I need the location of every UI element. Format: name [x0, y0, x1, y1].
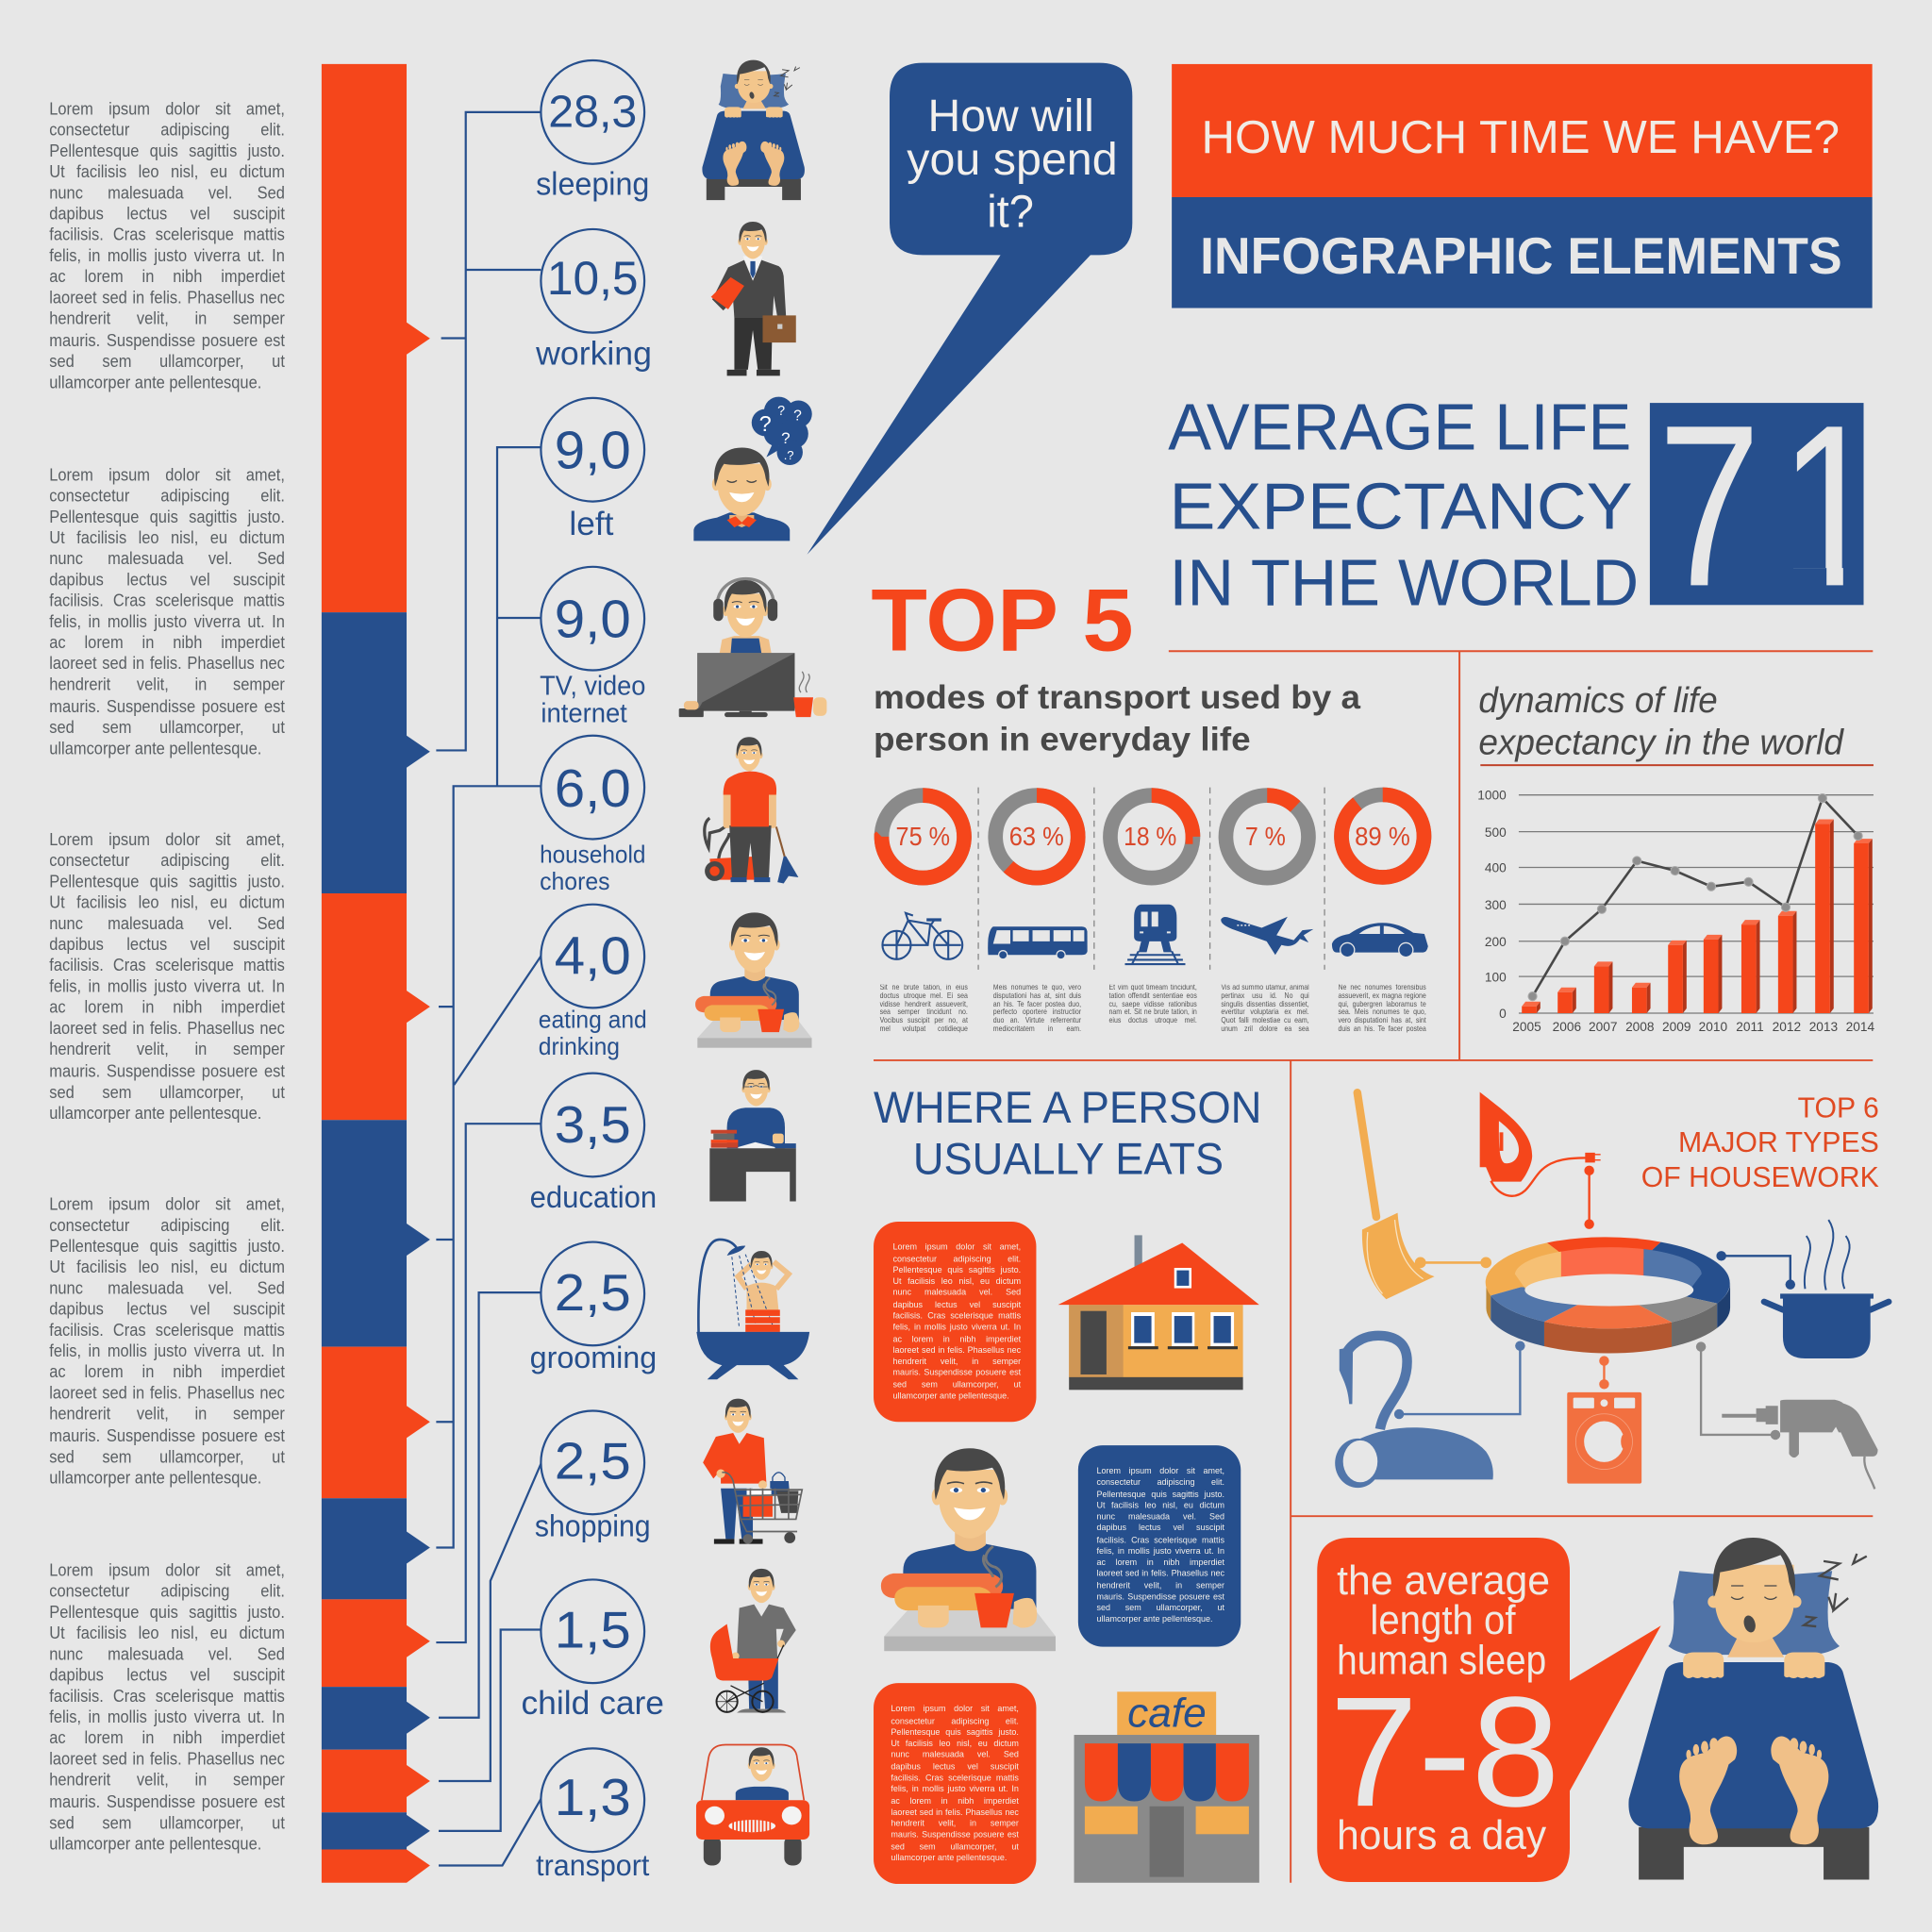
- text block 4: ac lorem in nibh imperdiet: [49, 1362, 285, 1381]
- text block 4: mauris. Suspendisse posuere est: [49, 1425, 285, 1444]
- panel: orange text box 2: Ut facilisis leo nisl, eu dictum: [891, 1740, 1019, 1749]
- panel: orange text box 1: consectetur adipiscing elit.: [893, 1255, 1021, 1264]
- text block 3: consectetur adipiscing elit.: [49, 850, 285, 870]
- panel: orange text box 2: felis, in mollis justo viverra ut. In: [891, 1786, 1019, 1794]
- text block 4: laoreet sed in felis. Phasellus nec: [49, 1383, 285, 1403]
- text blocks: left column: [49, 98, 286, 1857]
- panel: orange text box 2: ac lorem in nibh imperdiet: [891, 1797, 1019, 1806]
- text block 5: laoreet sed in felis. Phasellus nec: [49, 1749, 285, 1769]
- caption 3: [1109, 985, 1198, 1036]
- panel: orange text box 2: [874, 1683, 1036, 1884]
- circle: 6,0 household: chores: [540, 867, 610, 895]
- text block 2: laoreet sed in felis. Phasellus nec: [49, 654, 285, 674]
- text block 5: dapibus lectus vel suscipit: [49, 1665, 285, 1684]
- icon: thinking man with question bubble: [693, 397, 812, 541]
- text block 2: Lorem ipsum dolor sit amet,: [49, 464, 285, 484]
- heading: top 5: modes of transport used by a: [874, 679, 1360, 716]
- circle: 1,5 child care: child care: [521, 1685, 664, 1722]
- text block 4: Ut facilisis leo nisl, eu dictum: [49, 1257, 285, 1276]
- text block 1: consectetur adipiscing elit.: [49, 119, 285, 139]
- circle: 6,0 household: household: [540, 840, 645, 868]
- panel: blue text box: Pellentesque quis sagittis justo.: [1096, 1491, 1224, 1499]
- text block 4: nunc malesuada vel. Sed: [49, 1277, 285, 1297]
- text block 4: hendrerit velit, in semper: [49, 1404, 285, 1424]
- panel: orange text box 2: hendrerit velit, in semper: [891, 1820, 1019, 1828]
- text block 4: ullamcorper ante pellentesque.: [49, 1467, 261, 1487]
- circle: 9,0 TV: TV, video: [540, 672, 645, 702]
- text block 3: laoreet sed in felis. Phasellus nec: [49, 1018, 285, 1038]
- icon: thinking man with question bubble: ?: [781, 429, 791, 447]
- panel: orange text box 1: mauris. Suspendisse posuere est: [893, 1370, 1021, 1378]
- circle: 4,0 eating: [539, 905, 647, 1060]
- caption 2: an his. Te facer postea duo,: [993, 1000, 1081, 1008]
- donut: 89 percent: [1341, 794, 1424, 877]
- caption 1: mel volutpat cotidieque: [879, 1024, 967, 1033]
- heading: top 5: [871, 571, 1360, 758]
- donut: 75 percent: 75 %: [896, 822, 950, 851]
- panel: orange text box 1: nunc malesuada vel. Sed: [893, 1290, 1021, 1298]
- panel: blue text box: laoreet sed in felis. Phasellus nec: [1096, 1571, 1224, 1579]
- text block 2: dapibus lectus vel suscipit: [49, 569, 285, 589]
- donut: 75 percent: [882, 795, 964, 878]
- text block 5: consectetur adipiscing elit.: [49, 1580, 285, 1600]
- activity circles and labels: [521, 60, 664, 1882]
- heading: average life expectancy 71: EXPECTANCY: [1170, 469, 1633, 542]
- circle: 6,0 household: [540, 736, 645, 895]
- icon: power drill with connector: [1696, 1341, 1878, 1489]
- icon: vacuum cleaner with connector: [1335, 1336, 1525, 1488]
- circle: 3,5 education: education: [530, 1179, 657, 1214]
- chart: life expectancy bars and line: 1000: [1477, 789, 1507, 803]
- bars: [1522, 819, 1873, 1013]
- speech bubble: how will you spend it: [808, 63, 1132, 555]
- title banner: HOW MUCH TIME WE HAVE?: [1201, 112, 1840, 163]
- panel: blue text box: ullamcorper ante pellentesque.: [1096, 1616, 1213, 1624]
- caption 4: [1221, 985, 1309, 1036]
- chart: life expectancy bars and line: 2006: [1553, 1020, 1581, 1034]
- heading: top 6 major types of housework: TOP 6: [1798, 1091, 1879, 1124]
- panel: orange text box 2: laoreet sed in felis. Phasellus nec: [891, 1808, 1019, 1817]
- panel: orange text box 1: dapibus lectus vel suscipit: [893, 1301, 1021, 1309]
- chart: life expectancy bars and line: 500: [1485, 825, 1507, 840]
- text block 4: [49, 1193, 286, 1491]
- circle: 2,5 shopping: [535, 1411, 651, 1543]
- donut: 18 percent: 18 %: [1124, 822, 1176, 851]
- text block 3: dapibus lectus vel suscipit: [49, 934, 285, 954]
- icon: person driving car: [696, 1744, 809, 1865]
- heading: top 6 major types of housework: [1641, 1091, 1879, 1193]
- text block 1: Lorem ipsum dolor sit amet,: [49, 98, 285, 118]
- callout: average length of human sleep: the average: [1337, 1558, 1550, 1604]
- icon: person with baby stroller: [710, 1569, 796, 1713]
- heading: top 6 major types of housework: MAJOR TYPES: [1678, 1125, 1879, 1158]
- chart: life expectancy bars and line: 2014: [1846, 1020, 1874, 1034]
- circle: 28,3 sleeping: [536, 60, 649, 202]
- donut: 7 percent: [1225, 795, 1308, 878]
- chart: life expectancy bars and line: 0: [1499, 1007, 1507, 1021]
- text block 5: mauris. Suspendisse posuere est: [49, 1790, 285, 1810]
- icon: person shopping with cart: [703, 1399, 802, 1544]
- icon: person studying at desk: [709, 1070, 796, 1201]
- panel: blue text box: facilisis. Cras scelerisque mattis: [1096, 1536, 1224, 1544]
- panel: blue text box: dapibus lectus vel suscipit: [1096, 1524, 1224, 1533]
- caption 4: evertitur voluptaria ex mel.: [1221, 1008, 1309, 1017]
- text block 2: sed sem ullamcorper, ut: [49, 717, 285, 737]
- text block 5: Pellentesque quis sagittis justo.: [49, 1602, 285, 1621]
- panel: orange text box 1: Lorem ipsum dolor sit amet,: [893, 1243, 1021, 1253]
- text block 1: ac lorem in nibh imperdiet: [49, 266, 285, 286]
- text block 5: Lorem ipsum dolor sit amet,: [49, 1559, 285, 1579]
- text block 1: laoreet sed in felis. Phasellus nec: [49, 288, 285, 308]
- circle: 2,5 grooming: [530, 1242, 657, 1374]
- text block 1: ullamcorper ante pellentesque.: [49, 372, 261, 391]
- caption 5: [1339, 985, 1427, 1036]
- text block 4: facilisis. Cras scelerisque mattis: [49, 1320, 285, 1340]
- speech bubble: how will you spend it: How will: [928, 91, 1094, 142]
- icon: thinking man with question bubble: ?: [777, 404, 785, 419]
- circle: 9,0 left: left: [569, 506, 614, 542]
- text block 1: sed sem ullamcorper, ut: [49, 351, 285, 371]
- text block 3: nunc malesuada vel. Sed: [49, 913, 285, 933]
- panel: orange text box 2: ullamcorper ante pellentesque.: [891, 1855, 1007, 1863]
- circle: 1,3 transport: transport: [536, 1849, 650, 1882]
- circle: 1,3 transport: 1,3: [555, 1768, 631, 1826]
- text block 2: nunc malesuada vel. Sed: [49, 548, 285, 568]
- panel: blue text box: Lorem ipsum dolor sit amet,: [1096, 1468, 1224, 1476]
- circle: 9,0 TV: [540, 567, 645, 728]
- circle: 1,5 child care: 1,5: [555, 1600, 631, 1658]
- donut: 7 percent: 7 %: [1245, 822, 1286, 851]
- circle: 1,5 child care: [521, 1579, 664, 1722]
- text block 2: Ut facilisis leo nisl, eu dictum: [49, 527, 285, 547]
- circle: 2,5 grooming: 2,5: [555, 1263, 631, 1322]
- caption 5: sea. Meis nonumes te quo,: [1339, 1008, 1426, 1017]
- text block 1: felis, in mollis justo viverra ut. In: [49, 245, 285, 265]
- circle: 6,0 household: 6,0: [555, 758, 631, 818]
- caption 5: assueverit, ex magna regione: [1339, 991, 1426, 1001]
- caption 2: mediocritatem in eam.: [993, 1024, 1081, 1033]
- text block 3: sed sem ullamcorper, ut: [49, 1081, 285, 1101]
- icon: broom with connector: [1357, 1092, 1491, 1299]
- text block 3: ullamcorper ante pellentesque.: [49, 1103, 261, 1123]
- heading: average life expectancy 71: 7: [1657, 376, 1760, 634]
- text block 1: facilisis. Cras scelerisque mattis: [49, 225, 285, 244]
- icon: sleeping person large: [1628, 1538, 1878, 1879]
- text block 5: felis, in mollis justo viverra ut. In: [49, 1707, 285, 1726]
- panel: orange text box 1: laoreet sed in felis. Phasellus nec: [893, 1346, 1021, 1355]
- panel: blue text box: mauris. Suspendisse posuere est: [1096, 1593, 1224, 1602]
- icon: cafe building: cafe: [1127, 1691, 1207, 1737]
- circle: 9,0 left: [541, 398, 644, 542]
- icon: cooking pot with connector: [1716, 1220, 1889, 1358]
- chart: life expectancy bars and line: 2008: [1625, 1020, 1655, 1034]
- icon: person with headphones at monitor: [679, 579, 826, 717]
- text block 4: dapibus lectus vel suscipit: [49, 1299, 285, 1319]
- caption 3: eius doctus utroque mel.: [1109, 1017, 1197, 1025]
- small captions under transport modes: [879, 985, 1427, 1036]
- chart: life expectancy bars and line: 2012: [1773, 1020, 1801, 1034]
- chart: life expectancy bars and line: 2010: [1699, 1020, 1728, 1034]
- icon: person eating large: [881, 1448, 1056, 1651]
- chart: life expectancy bars and line: 2007: [1589, 1020, 1618, 1034]
- text block 3: Ut facilisis leo nisl, eu dictum: [49, 891, 285, 911]
- text block 2: ullamcorper ante pellentesque.: [49, 738, 261, 758]
- title banner: INFOGRAPHIC ELEMENTS: [1200, 226, 1842, 285]
- text block 3: mauris. Suspendisse posuere est: [49, 1060, 285, 1080]
- line series: [1528, 794, 1862, 1001]
- text block 2: Pellentesque quis sagittis justo.: [49, 506, 285, 525]
- heading: average life expectancy 71: AVERAGE LIFE: [1168, 391, 1631, 464]
- caption 1: [879, 985, 968, 1036]
- icon: working man with briefcase: [711, 222, 796, 375]
- heading: where a person usually eats: WHERE A PERSON: [874, 1082, 1261, 1132]
- icon: thinking man with question bubble: ?: [759, 411, 772, 436]
- text block 4: Lorem ipsum dolor sit amet,: [49, 1193, 285, 1213]
- icon: thinking man with question bubble: .?: [784, 448, 794, 462]
- speech bubble: how will you spend it: it?: [987, 186, 1034, 237]
- panel: orange text box 1: Pellentesque quis sagittis justo.: [893, 1267, 1021, 1275]
- circle: 2,5 shopping: shopping: [535, 1508, 651, 1543]
- caption 2: disputationi has at, sint duis: [993, 991, 1081, 1001]
- text block 5: ac lorem in nibh imperdiet: [49, 1728, 285, 1747]
- panel: blue text box: hendrerit velit, in semper: [1096, 1582, 1224, 1591]
- caption 1: vidisse hendrerit assueverit,: [879, 1000, 967, 1008]
- icon: person doing household chores: [705, 737, 798, 883]
- callout: average length of human sleep: [1317, 1538, 1661, 1882]
- panel: orange text box 1: felis, in mollis justo viverra ut. In: [893, 1324, 1021, 1332]
- panel: orange text box 2: facilisis. Cras scelerisque mattis: [891, 1774, 1019, 1783]
- chart: life expectancy bars and line: 2011: [1736, 1020, 1764, 1034]
- circle: 2,5 grooming: grooming: [530, 1340, 657, 1374]
- caption 4: singulis dissentias dissentiet,: [1221, 1000, 1309, 1008]
- icon: washing machine with connector: [1567, 1356, 1641, 1484]
- text block 2: felis, in mollis justo viverra ut. In: [49, 611, 285, 631]
- panel: orange text box 1: sed sem ullamcorper, ut: [893, 1381, 1021, 1390]
- text block 3: Lorem ipsum dolor sit amet,: [49, 828, 285, 848]
- icon: cafe building: [1074, 1691, 1259, 1883]
- callout: average length of human sleep: length of: [1370, 1598, 1516, 1643]
- text block 4: felis, in mollis justo viverra ut. In: [49, 1341, 285, 1360]
- circle: 4,0 eating: 4,0: [555, 925, 631, 985]
- circle: 28,3 sleeping: sleeping: [536, 166, 649, 202]
- caption 3: cu, saepe vidisse rationibus: [1109, 1000, 1197, 1008]
- icon: bus: [988, 926, 1088, 959]
- caption 1: doctus utroque mel. Ei sea: [879, 991, 967, 1001]
- chart: 3D housework ring: [1486, 1237, 1730, 1354]
- heading: dynamics of life expectancy: [1478, 681, 1874, 765]
- chart: life expectancy bars and line: 400: [1485, 861, 1507, 875]
- icon: thinking man with question bubble: ?: [793, 408, 802, 424]
- panel: blue text box: sed sem ullamcorper, ut: [1096, 1605, 1224, 1613]
- text block 3: Pellentesque quis sagittis justo.: [49, 871, 285, 891]
- circle: 3,5 education: 3,5: [555, 1095, 631, 1154]
- heading: where a person usually eats: USUALLY EATS: [913, 1134, 1224, 1184]
- text block 4: Pellentesque quis sagittis justo.: [49, 1236, 285, 1256]
- circle: 10,5 working: working: [535, 336, 652, 373]
- text block 3: [49, 828, 286, 1125]
- circle: 9,0 left: 9,0: [555, 420, 631, 479]
- panel: orange text box 1: hendrerit velit, in semper: [893, 1357, 1021, 1367]
- circle: 9,0 TV: internet: [541, 698, 627, 728]
- panel: blue text box: consectetur adipiscing elit.: [1096, 1479, 1224, 1488]
- text block 5: Ut facilisis leo nisl, eu dictum: [49, 1623, 285, 1642]
- text block 2: facilisis. Cras scelerisque mattis: [49, 591, 285, 610]
- panel: orange text box 1: ac lorem in nibh imperdiet: [893, 1335, 1021, 1343]
- donut: 18 percent: [1110, 795, 1192, 878]
- caption 1: Vocibus suscipit per no, at: [879, 1017, 967, 1025]
- chart: life expectancy bars and line: 300: [1485, 898, 1507, 912]
- panel: orange text box 2: nunc malesuada vel. Sed: [891, 1752, 1019, 1760]
- panel: orange text box 1: Ut facilisis leo nisl, eu dictum: [893, 1278, 1021, 1287]
- caption 4: pertinax usu id. No qui: [1221, 991, 1309, 1001]
- caption 1: sea semper tincidunt no.: [879, 1008, 967, 1017]
- caption 5: qui, gubergren laboramus te: [1339, 1000, 1426, 1008]
- text block 2: [49, 464, 286, 761]
- text block 1: mauris. Suspendisse posuere est: [49, 329, 285, 349]
- panel: orange text box 2: sed sem ullamcorper, ut: [891, 1842, 1019, 1852]
- text block 5: facilisis. Cras scelerisque mattis: [49, 1686, 285, 1706]
- caption 5: duis an his. Te facer postea: [1339, 1024, 1426, 1033]
- text block 3: hendrerit velit, in semper: [49, 1040, 285, 1059]
- heading: average life expectancy 71: [1168, 403, 1864, 606]
- panel: orange text box 2: mauris. Suspendisse posuere est: [891, 1831, 1019, 1840]
- callout: average length of human sleep: 7-8: [1329, 1665, 1560, 1840]
- circle: 4,0 eating: eating and: [539, 1005, 647, 1033]
- chart: life expectancy bars and line: 2013: [1809, 1020, 1839, 1034]
- caption 4: unum zril dolore ea sea: [1221, 1024, 1309, 1033]
- text block 1: hendrerit velit, in semper: [49, 308, 285, 328]
- heading: where a person usually eats: [874, 1082, 1261, 1184]
- text block 4: consectetur adipiscing elit.: [49, 1214, 285, 1234]
- circle: 9,0 TV: 9,0: [555, 589, 631, 648]
- stacked time bar with arrows: [322, 64, 430, 1883]
- icon: person bathing in tub: [696, 1240, 809, 1379]
- text block 5: ullamcorper ante pellentesque.: [49, 1833, 261, 1853]
- caption 2: duo an. Virtute referrentur: [993, 1017, 1081, 1025]
- caption 3: tation offendit sententiae eos: [1109, 991, 1197, 1001]
- circle: 10,5 working: 10,5: [547, 252, 639, 305]
- chart: life expectancy bars and line: 100: [1485, 970, 1507, 984]
- panel: blue text box: felis, in mollis justo viverra ut. In: [1096, 1547, 1224, 1556]
- caption 3: nam et. Sit ne brute tation, in: [1109, 1008, 1197, 1017]
- heading: dynamics of life expectancy: expectancy in the world: [1478, 723, 1845, 762]
- circle: 2,5 shopping: 2,5: [555, 1431, 631, 1490]
- donut charts: [882, 794, 1424, 878]
- panel: blue text box: [1078, 1445, 1241, 1647]
- caption 5: vero disputationi has at, sint: [1339, 1017, 1426, 1025]
- caption 2: [993, 985, 1082, 1036]
- panel: orange text box 1: facilisis. Cras scelerisque mattis: [893, 1312, 1021, 1321]
- chart: life expectancy bars and line: [1477, 789, 1874, 1034]
- panel: blue text box: Ut facilisis leo nisl, eu dictum: [1096, 1502, 1224, 1510]
- heading: average life expectancy 71: IN THE WORLD: [1170, 545, 1639, 619]
- chart: life expectancy bars and line: 200: [1485, 935, 1507, 949]
- heading: top 5: TOP 5: [871, 571, 1134, 670]
- text block 5: sed sem ullamcorper, ut: [49, 1812, 285, 1832]
- icon: bicycle: [882, 913, 962, 959]
- speech bubble: how will you spend it: you spend: [907, 134, 1118, 185]
- text block 1: nunc malesuada vel. Sed: [49, 182, 285, 202]
- icon: sleeping person small: [702, 60, 805, 200]
- icon: car: [1332, 923, 1428, 958]
- panel: orange text box 2: Lorem ipsum dolor sit amet,: [891, 1706, 1019, 1714]
- panel: orange text box 1: [874, 1222, 1036, 1422]
- donut: 89 percent: 89 %: [1355, 822, 1410, 851]
- circle: 3,5 education: [530, 1074, 657, 1214]
- text block 1: Pellentesque quis sagittis justo.: [49, 140, 285, 159]
- panel: blue text box: nunc malesuada vel. Sed: [1096, 1513, 1224, 1522]
- text block 1: dapibus lectus vel suscipit: [49, 203, 285, 223]
- heading: dynamics of life expectancy: dynamics of life: [1478, 681, 1718, 721]
- panel: orange text box 2: dapibus lectus vel suscipit: [891, 1763, 1019, 1772]
- donut: 63 percent: 63 %: [1009, 822, 1064, 851]
- panel: orange text box 2: consectetur adipiscing elit.: [891, 1717, 1019, 1725]
- text block 5: hendrerit velit, in semper: [49, 1770, 285, 1790]
- circle: 1,3 transport: [536, 1748, 650, 1882]
- heading: top 6 major types of housework: OF HOUSEWORK: [1641, 1160, 1879, 1193]
- donut: 63 percent: [995, 795, 1078, 878]
- text block 2: ac lorem in nibh imperdiet: [49, 632, 285, 652]
- text block 2: hendrerit velit, in semper: [49, 675, 285, 694]
- heading: top 5: person in everyday life: [874, 721, 1251, 758]
- text block 3: facilisis. Cras scelerisque mattis: [49, 955, 285, 974]
- circle: 28,3 sleeping: 28,3: [548, 87, 637, 138]
- callout: average length of human sleep: human sleep: [1337, 1638, 1546, 1683]
- circle: 4,0 eating: drinking: [539, 1032, 620, 1060]
- chart: life expectancy bars and line: 2005: [1512, 1020, 1541, 1034]
- icon: train: [1124, 905, 1185, 964]
- text block 3: felis, in mollis justo viverra ut. In: [49, 976, 285, 996]
- caption 4: Quot falli molestiae cu eam,: [1221, 1017, 1309, 1025]
- icon: house: [1058, 1235, 1259, 1390]
- icon: airplane: [1221, 917, 1313, 955]
- text block 5: [49, 1559, 286, 1857]
- icon: iron with connector: [1480, 1092, 1601, 1229]
- title banner: [1172, 64, 1873, 308]
- text block 1: Ut facilisis leo nisl, eu dictum: [49, 161, 285, 181]
- circle: 10,5 working: [535, 229, 652, 373]
- text block 2: consectetur adipiscing elit.: [49, 485, 285, 505]
- chart: life expectancy bars and line: 2009: [1662, 1020, 1690, 1034]
- panel: orange text box 2: Pellentesque quis sagittis justo.: [891, 1728, 1019, 1738]
- text block 1: [49, 98, 286, 395]
- callout: average length of human sleep: hours a day: [1337, 1813, 1547, 1858]
- text block 4: sed sem ullamcorper, ut: [49, 1446, 285, 1466]
- icon: person eating small: [695, 912, 811, 1048]
- panel: orange text box 1: ullamcorper ante pellentesque.: [893, 1392, 1009, 1401]
- text block 5: nunc malesuada vel. Sed: [49, 1643, 285, 1663]
- text block 2: mauris. Suspendisse posuere est: [49, 695, 285, 715]
- connector lines: [436, 112, 541, 1865]
- text block 3: ac lorem in nibh imperdiet: [49, 997, 285, 1017]
- panel: blue text box: ac lorem in nibh imperdiet: [1096, 1558, 1224, 1568]
- caption 2: perfecto oportere instructior: [993, 1008, 1081, 1017]
- heading: average life expectancy 71: 1: [1779, 376, 1882, 634]
